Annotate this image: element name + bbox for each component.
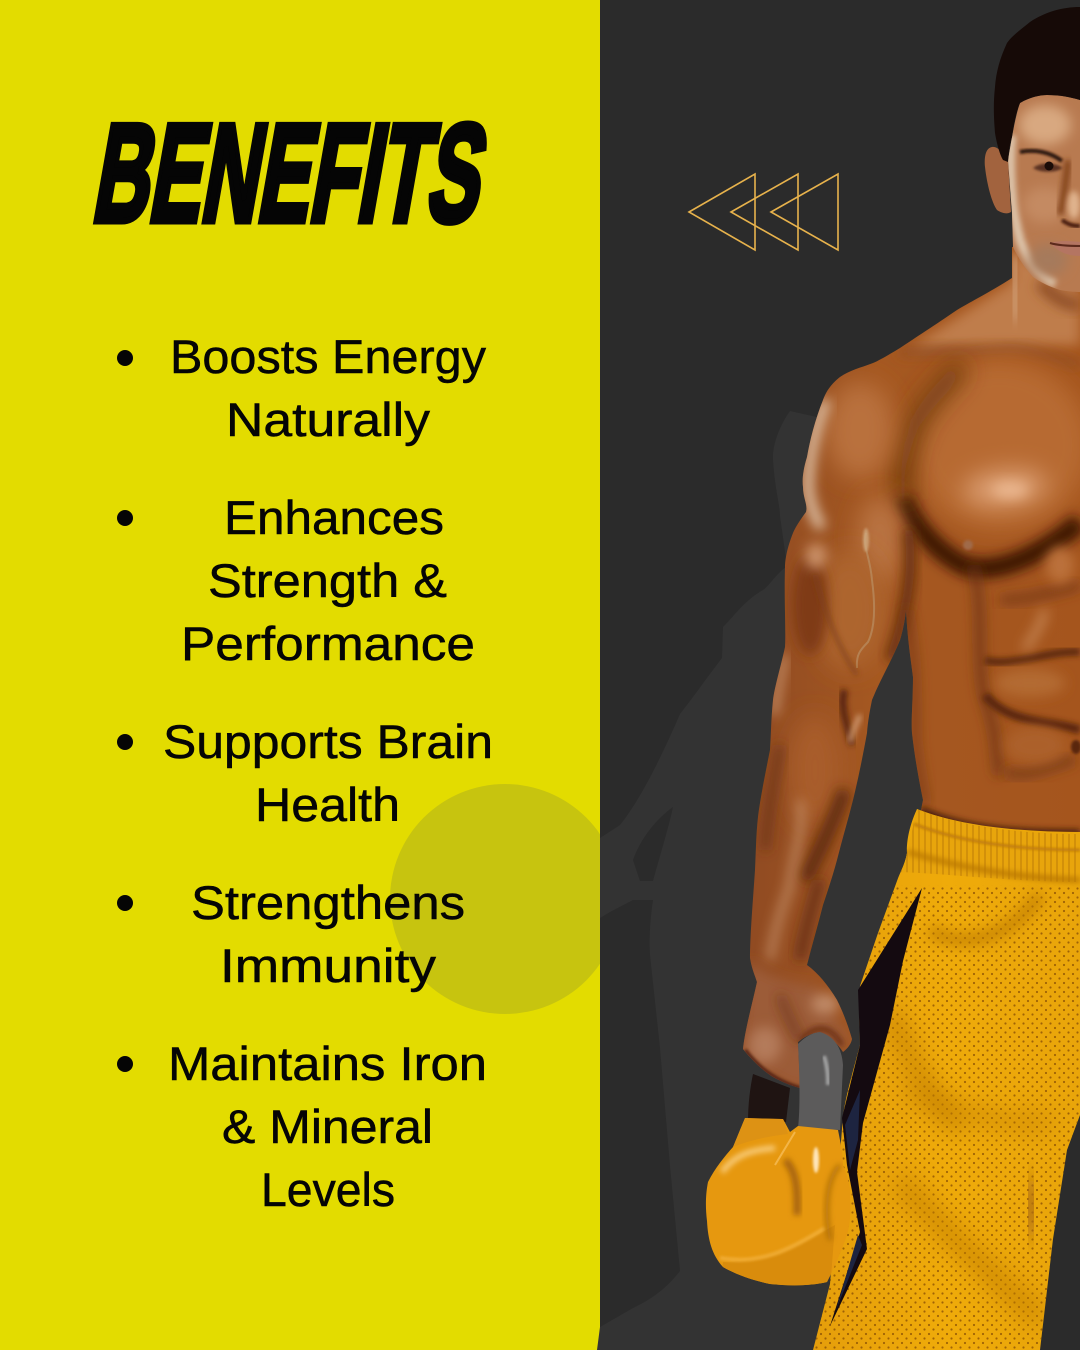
hair — [994, 7, 1080, 162]
benefit: supports brain health: Supports Brain — [163, 715, 493, 768]
benefit: supports brain health: Health — [255, 778, 400, 831]
benefit: boosts energy naturally — [117, 330, 487, 446]
benefit: strengthens immunity: Immunity — [220, 939, 437, 992]
face shading — [1010, 105, 1080, 284]
kettlebell — [706, 1032, 850, 1290]
benefit: supports brain health — [117, 715, 493, 831]
biceps — [858, 496, 902, 584]
waistband — [900, 809, 940, 872]
decorative circle — [390, 784, 620, 1014]
head — [985, 7, 1080, 292]
pectoral base — [910, 360, 1080, 530]
stripe blue sheen — [836, 1090, 862, 1310]
benefit: enhances strength and performance: Enhances — [224, 491, 444, 544]
benefit: maintains iron and mineral levels: Levels — [261, 1163, 395, 1216]
deltoid glow — [826, 382, 894, 478]
collarbone — [900, 348, 1080, 365]
benefit: maintains iron and mineral levels: & Mineral — [222, 1100, 433, 1153]
navel — [1071, 740, 1080, 754]
deltoid and pec separation — [903, 366, 962, 500]
benefit: strengthens immunity — [117, 876, 465, 992]
pectoral lower shadow — [903, 497, 1080, 568]
shoulder highlight — [808, 400, 826, 528]
elbow — [843, 690, 852, 745]
fabric folds — [930, 895, 1040, 940]
nipple — [963, 540, 973, 550]
benefit: enhances strength and performance — [117, 491, 475, 670]
benefits list — [117, 330, 493, 1216]
black side stripe — [830, 888, 922, 1326]
icon: triple triangle arrows — [689, 174, 838, 250]
benefit: maintains iron and mineral levels — [117, 1037, 487, 1216]
brow — [1020, 151, 1062, 161]
eye — [1033, 164, 1063, 172]
kettlebell back handle — [748, 1074, 790, 1122]
man: photo-style illustration — [706, 7, 1080, 1350]
ear — [985, 147, 1011, 213]
benefit: boosts energy naturally: Naturally — [226, 393, 431, 446]
nose — [1068, 191, 1080, 219]
neck and torso with arm — [740, 247, 1080, 1090]
vein — [857, 533, 874, 668]
panel: dark background — [600, 0, 1080, 1350]
abs — [973, 565, 1000, 775]
forearm — [789, 715, 841, 825]
heading: benefits title: BENEFITS — [85, 95, 498, 251]
benefit: strengthens immunity: Strengthens — [191, 876, 465, 929]
benefit: maintains iron and mineral levels: Maintains Iron — [168, 1037, 487, 1090]
pectoral highlight — [961, 466, 1049, 510]
handle highlight — [824, 1056, 828, 1085]
face — [1008, 95, 1080, 292]
bell body — [706, 1118, 850, 1285]
waist shadow — [920, 812, 1080, 835]
lips — [1050, 241, 1080, 256]
eye socket shade — [1060, 160, 1068, 215]
bell lower tone — [720, 1225, 835, 1290]
mesh texture — [810, 885, 1080, 1350]
benefit: boosts energy naturally: Boosts Energy — [170, 330, 487, 383]
handle — [798, 1032, 843, 1130]
triceps — [792, 555, 828, 655]
neck and traps — [910, 250, 1080, 348]
panel: yellow benefits background — [0, 0, 600, 1350]
bell highlights — [722, 1148, 775, 1172]
bell crease — [785, 1160, 797, 1215]
ghost silhouette behind the man — [597, 411, 930, 1350]
muscle shading — [740, 250, 1080, 1090]
shorts — [810, 809, 1080, 1350]
wrist and hand — [740, 960, 850, 1090]
benefit: enhances strength and performance: Performance — [181, 617, 475, 670]
benefit: enhances strength and performance: Strength & — [208, 554, 447, 607]
